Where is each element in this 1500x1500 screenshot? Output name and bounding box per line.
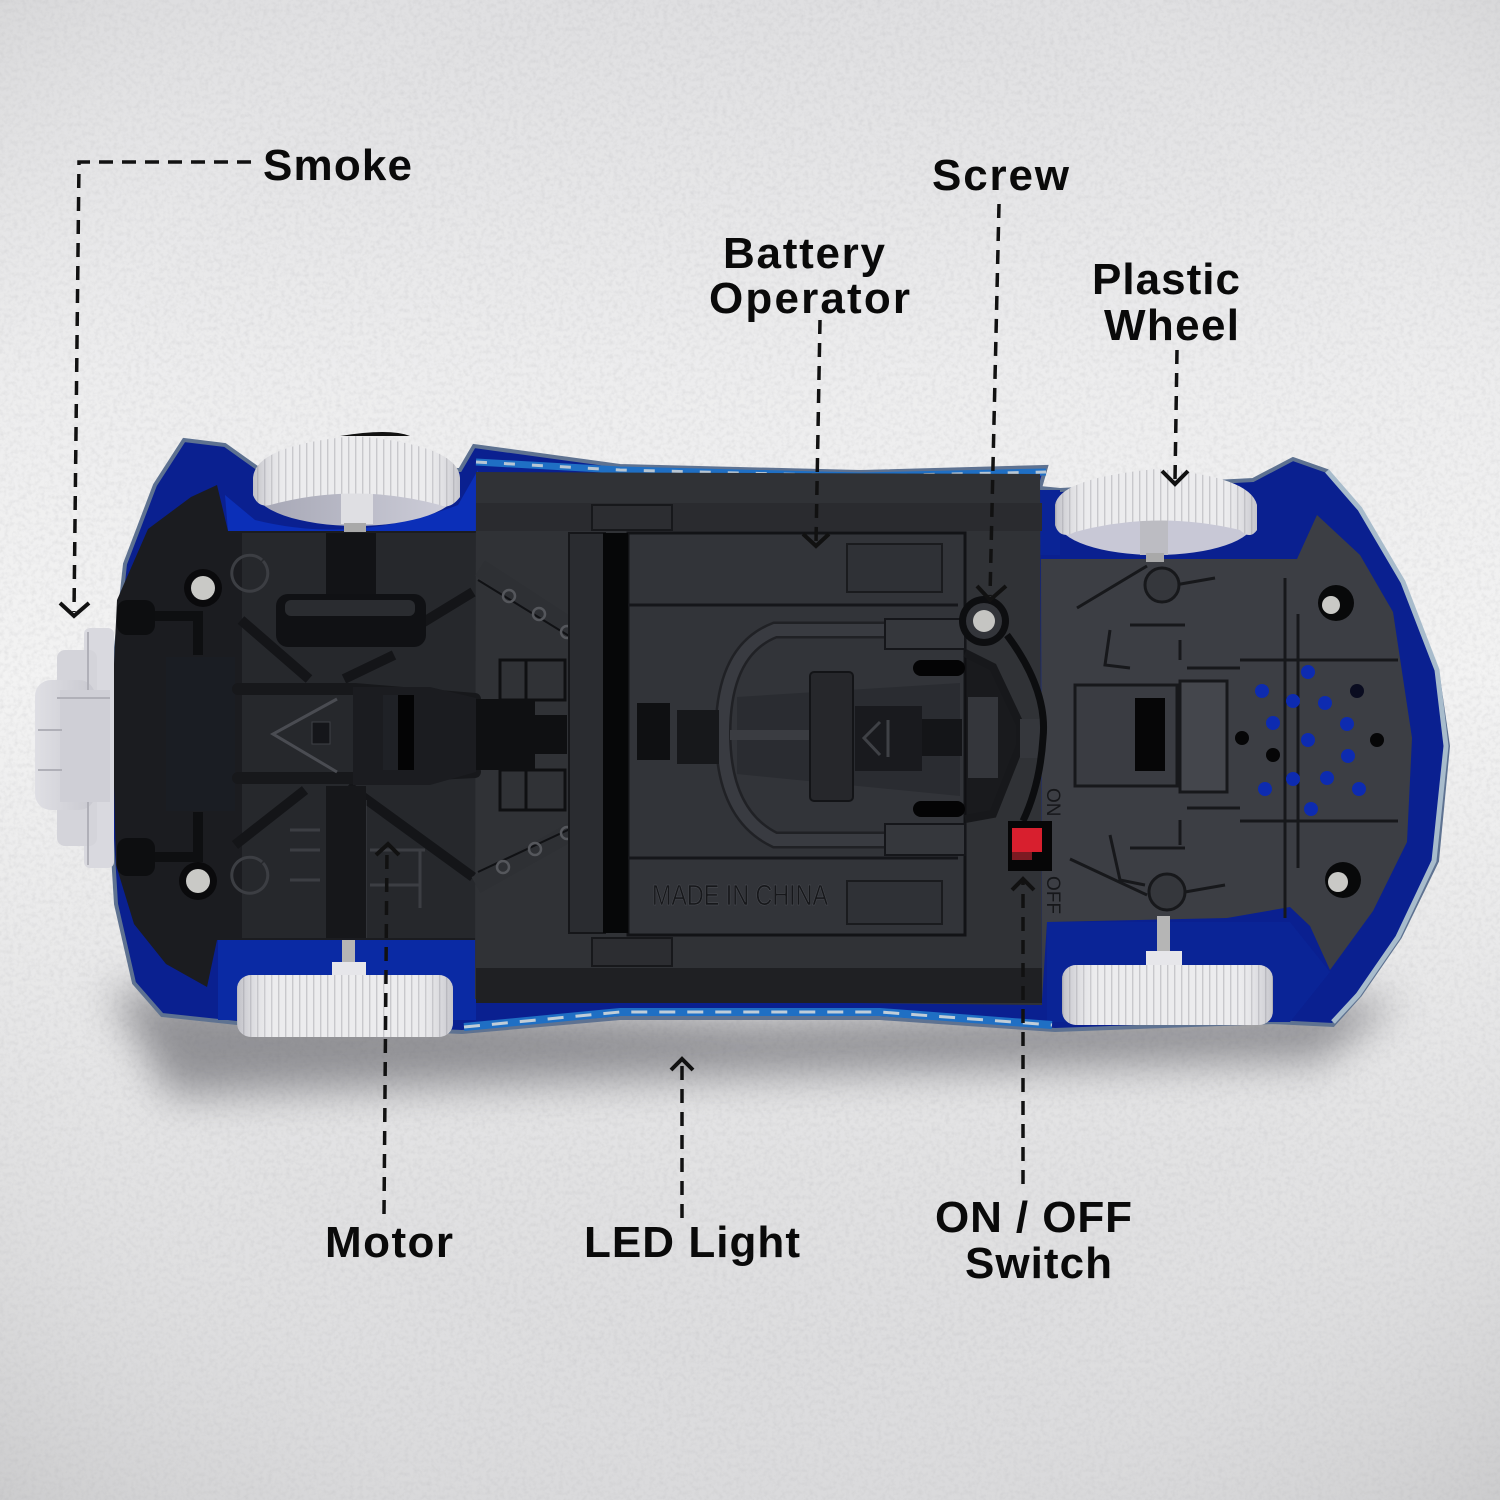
rear screws bbox=[179, 569, 222, 900]
callout: Smoke bbox=[60, 141, 412, 616]
callout: Screw bbox=[932, 151, 1070, 600]
battery cover bbox=[592, 505, 965, 966]
rear panel bbox=[242, 533, 476, 938]
linkage bands with rivets bbox=[476, 533, 605, 933]
front chassis plate bbox=[1041, 515, 1412, 1000]
wheel: front bottom bbox=[1062, 916, 1273, 1025]
callout: Screw: Screw bbox=[932, 151, 1070, 200]
on/off switch: OFF bbox=[1042, 876, 1063, 914]
on/off switch bbox=[1008, 788, 1063, 914]
callout: Plastic Wheel bbox=[1092, 255, 1240, 484]
callout: ON / OFF Switch: ON / OFF bbox=[935, 1193, 1132, 1242]
callout: LED Light: LED Light bbox=[584, 1218, 800, 1267]
front chassis detail bbox=[1070, 566, 1398, 918]
callout: Smoke: Smoke bbox=[263, 141, 412, 190]
wheel: front top bbox=[1055, 469, 1257, 562]
wheel: rear top bbox=[253, 432, 460, 532]
car shadow bbox=[110, 990, 1400, 1095]
frame rods and center body bbox=[238, 689, 475, 778]
battery cover screw bbox=[959, 596, 1009, 646]
center chassis plate bbox=[475, 472, 1042, 1005]
rear chassis structure bbox=[117, 533, 567, 938]
wheel: rear bottom bbox=[237, 940, 453, 1037]
callout: Motor: Motor bbox=[325, 1218, 453, 1267]
callout: Battery Operator: Battery bbox=[723, 229, 886, 278]
front screws bbox=[1318, 585, 1361, 898]
octagon ring around battery latch bbox=[965, 635, 1044, 821]
callout: ON / OFF Switch: Switch bbox=[965, 1239, 1112, 1288]
callout: Plastic Wheel: Plastic bbox=[1092, 255, 1240, 304]
car body shell: blue bbox=[106, 440, 1448, 1032]
on/off switch: ON bbox=[1042, 788, 1063, 816]
callout: ON / OFF Switch bbox=[935, 879, 1132, 1288]
callout: Motor bbox=[325, 844, 453, 1267]
callout: LED Light bbox=[584, 1059, 800, 1267]
speaker holes bbox=[1235, 665, 1384, 816]
moulded text: MADE IN CHINA bbox=[652, 880, 829, 912]
toy car underside bbox=[35, 432, 1448, 1037]
motor housing bbox=[276, 594, 426, 647]
callout: Plastic Wheel: Wheel bbox=[1104, 301, 1239, 350]
callout: Battery Operator: Operator bbox=[709, 274, 910, 323]
callout: Battery Operator bbox=[709, 229, 910, 546]
smoke outlet bbox=[35, 628, 114, 868]
rear chassis plate bbox=[112, 485, 478, 987]
